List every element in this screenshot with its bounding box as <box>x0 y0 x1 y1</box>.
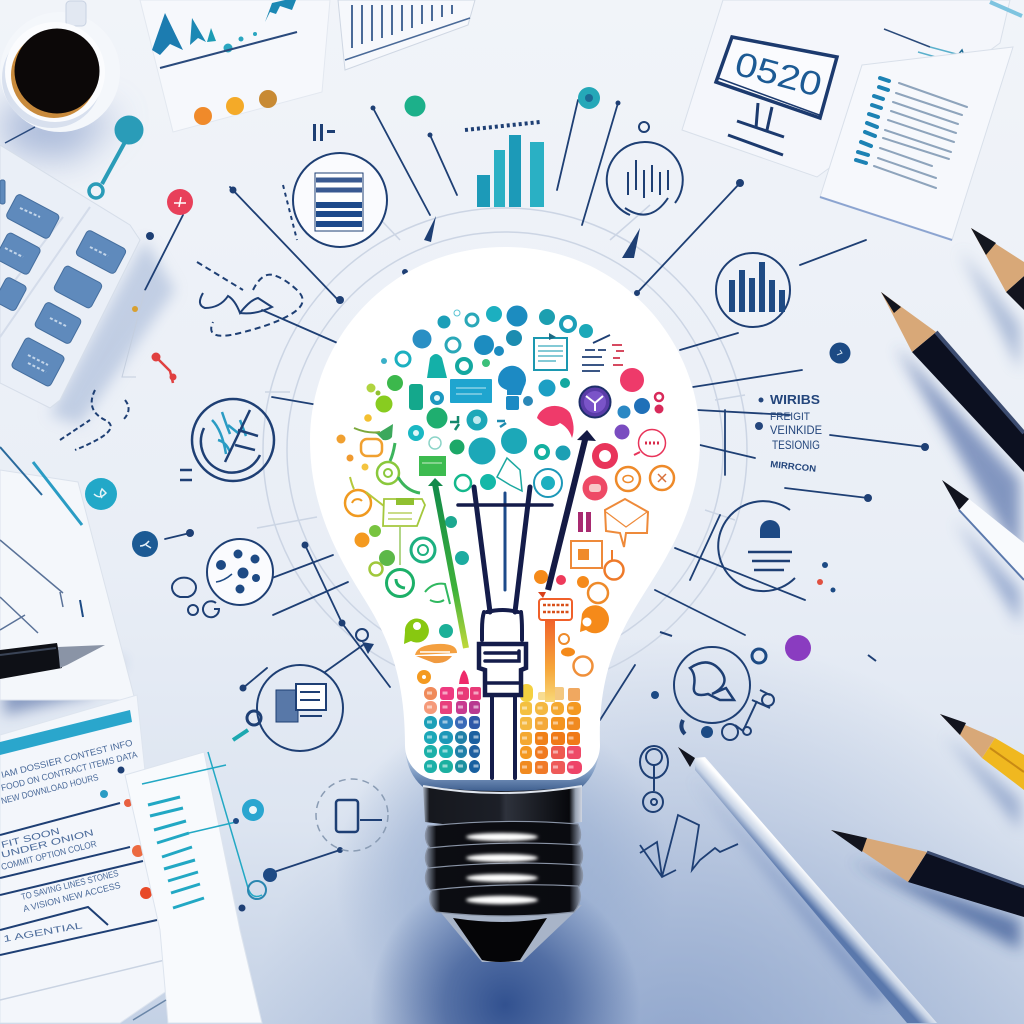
calculator keys <box>0 180 127 387</box>
line chart sketch <box>640 815 738 877</box>
report text <box>0 738 138 944</box>
icon: mountain chart <box>152 0 297 68</box>
orange chart tower <box>538 592 572 702</box>
icon: network circle <box>172 539 273 617</box>
text block: right labels: VEINKIDE <box>770 423 822 437</box>
teal header bar <box>0 710 132 755</box>
pencil: top right <box>971 228 1024 310</box>
icon: tree circle <box>180 399 274 481</box>
pencil: lower right dark <box>831 830 1024 917</box>
bulb neck shading <box>405 745 600 792</box>
orange burger and pink rocket <box>415 644 469 684</box>
report text: 1 AGENTIAL <box>3 920 83 944</box>
panel: top middle bar paper <box>338 0 475 70</box>
teal and blue icon cluster <box>381 306 624 410</box>
report text: FOOD ON CONTRACT ITEMS DATA <box>0 749 138 793</box>
icon: small glyphs near text <box>313 124 335 141</box>
report text: A VISION NEW ACCESS <box>22 880 122 914</box>
coloured tile grid right <box>520 684 582 774</box>
bulb glass <box>310 247 700 780</box>
icon: colored bar chart <box>465 122 544 207</box>
list rows <box>856 78 967 188</box>
icon: keyhole doodle <box>640 746 668 812</box>
navy arrow <box>548 430 596 590</box>
report text: IAM DOSSIER CONTEST INFO <box>0 738 133 780</box>
doodle: top left scribble <box>60 262 303 450</box>
panel: monitor paper <box>682 0 1010 177</box>
pencil: yellow <box>940 714 1024 790</box>
icon: person circle <box>718 501 836 592</box>
lamp screw base <box>423 786 583 962</box>
report text: UNDER ONION <box>0 827 95 860</box>
icon: dashed phone circle <box>316 779 388 851</box>
pencil: long white <box>678 747 937 1023</box>
green arrow <box>428 478 466 648</box>
icon: fountain pen <box>0 643 105 679</box>
text block: right labels: MIRRCON <box>770 459 817 474</box>
icon: bar chart circle <box>716 253 790 327</box>
teal bars <box>148 797 204 908</box>
thread bands <box>425 821 583 916</box>
text block: right labels <box>755 392 822 474</box>
left cluster: green orange <box>336 375 469 644</box>
icon: calculator <box>0 145 140 408</box>
middle teal green cluster <box>408 408 570 497</box>
tip housing <box>437 905 582 962</box>
collar <box>423 786 582 827</box>
filament and stem <box>458 487 552 778</box>
panel: lower left bar paper <box>125 752 262 1023</box>
text block: right labels: TESIONIG <box>772 438 820 452</box>
icon: signal circle <box>607 122 683 215</box>
report text: FIT SOON <box>0 826 61 850</box>
coloured tile grid left <box>424 687 481 773</box>
panel: top left chart paper <box>140 0 330 132</box>
radial guide rings <box>257 200 747 692</box>
report text: COMMIT OPTION COLOR <box>0 838 98 872</box>
icon: documents circle <box>233 629 368 751</box>
contact tip <box>453 918 547 962</box>
icon: monitor with number <box>716 37 837 155</box>
connector lines <box>145 100 925 875</box>
panel: lower left report <box>0 695 168 1023</box>
teal pen top right <box>990 2 1022 16</box>
connector end dots <box>146 100 929 853</box>
icon: coffee cup from above <box>0 1 120 143</box>
rule lines <box>0 803 157 955</box>
teal axis <box>142 752 262 896</box>
text block: right labels: FREIGIT <box>770 411 810 423</box>
teal nodes lower left <box>233 799 277 912</box>
report text: NEW DOWNLOAD HOURS <box>0 772 100 806</box>
panel: left mid papers <box>0 447 135 700</box>
pencil: white <box>942 480 1024 580</box>
key legends <box>5 208 108 372</box>
icon: striped chart circle <box>283 153 387 247</box>
light bulb <box>310 247 700 792</box>
colour accent dots <box>85 87 850 663</box>
panel: list document <box>820 47 1013 240</box>
text block: right labels: WIRIBS <box>770 392 820 407</box>
thread highlights <box>466 833 538 904</box>
right cluster: pink purple <box>534 368 674 676</box>
icon: three coloured dots <box>194 90 277 125</box>
icon: globe circle <box>651 632 876 740</box>
small sparkline <box>884 29 971 63</box>
pencil: black upper right <box>881 292 1024 472</box>
icon: monitor with number: 0520 <box>731 45 826 105</box>
report text: TO SAVING LINES STONES <box>20 868 120 902</box>
